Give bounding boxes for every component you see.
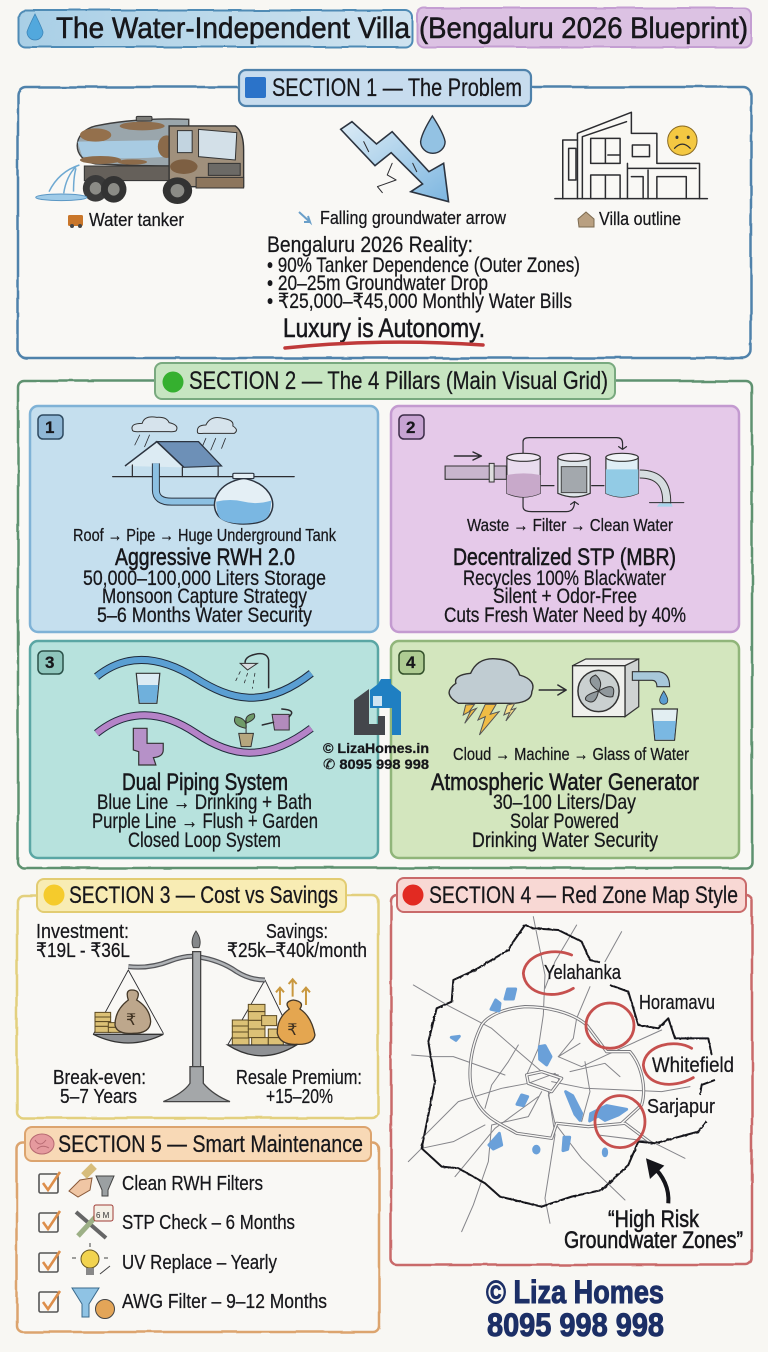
checklist row: STP check <box>39 1205 295 1238</box>
map arrow <box>652 1165 668 1203</box>
break-even value: Break-even: <box>53 1067 146 1089</box>
checklist row: clean RWH filters <box>39 1166 263 1197</box>
icon: balance scale: ₹ <box>126 1012 136 1029</box>
callout: luxury is autonomy: Luxury is Autonomy. <box>283 313 485 343</box>
pillar title: Aggressive RWH 2.0 <box>115 544 295 571</box>
caption: roof pipe tank: Roof → Pipe → Huge Underground Tank <box>73 525 336 545</box>
badge 4: 4 <box>406 653 416 672</box>
savings value <box>227 921 367 962</box>
text block: Bengaluru 2026 reality <box>267 232 580 313</box>
title banner <box>18 8 751 47</box>
map ring road <box>470 1007 652 1143</box>
text block: Bengaluru 2026 reality: • ₹25,000–₹45,000 Monthly Water Bills <box>267 290 572 313</box>
badge 2 <box>399 415 424 439</box>
pillar details: Recycles 100% Blackwater <box>463 567 666 590</box>
title text: The Water-Independent Villa <box>56 12 410 45</box>
icon: rain to underground tank <box>113 417 294 524</box>
pillar details <box>92 791 318 852</box>
panel: section 5 smart maintenance <box>17 1127 379 1332</box>
icon: water drop <box>27 14 43 40</box>
text block: Bengaluru 2026 reality: • 90% Tanker Dependence (Outer Zones) <box>267 254 580 277</box>
pillar details: 50,000–100,000 Liters Storage <box>83 567 326 590</box>
text block: Bengaluru 2026 reality: Bengaluru 2026 Reality: <box>267 232 473 257</box>
text block: Bengaluru 2026 reality: • 20–25m Groundwater Drop <box>267 272 488 295</box>
pillar details <box>472 791 658 852</box>
investment value <box>36 921 130 962</box>
pillar details: Monsoon Capture Strategy <box>102 585 307 608</box>
label: villa outline: Villa outline <box>599 209 681 229</box>
resale premium value: +15–20% <box>266 1086 333 1108</box>
section 2 header <box>155 363 615 399</box>
section 1 header: SECTION 1 — The Problem <box>272 74 522 102</box>
break-even value <box>53 1067 146 1108</box>
checklist row: AWG filter: AWG Filter – 9–12 Months <box>122 1291 327 1313</box>
badge 2: 2 <box>406 418 415 437</box>
pillar details: Purple Line → Flush + Garden <box>92 810 318 833</box>
checklist row: UV replace: UV Replace – Yearly <box>122 1252 277 1274</box>
pillar details: Cuts Fresh Water Need by 40% <box>444 604 686 627</box>
checklist row: clean RWH filters: Clean RWH Filters <box>122 1173 263 1195</box>
badge 3: 3 <box>45 653 54 672</box>
label: water tanker: Water tanker <box>89 210 184 230</box>
label: falling groundwater arrow: Falling groundwater arrow <box>320 208 507 228</box>
badge 3 <box>38 651 63 674</box>
pillar card 4: atmospheric water generator <box>391 641 739 858</box>
section 5 header <box>25 1127 371 1161</box>
pillar details: Closed Loop System <box>128 829 281 852</box>
map lakes <box>451 989 627 1156</box>
map: Bengaluru high-risk zones <box>408 917 715 1232</box>
resale premium value <box>236 1067 362 1108</box>
panel: section 1 the problem <box>18 70 751 358</box>
badge 1 <box>38 415 63 439</box>
pillar details: Silent + Odor-Free <box>493 585 637 608</box>
pillar title: Dual Piping System <box>122 769 288 796</box>
savings value: ₹25k–₹40k/month <box>227 940 367 962</box>
callout: high risk groundwater zones <box>564 1206 743 1254</box>
pillar details: Solar Powered <box>510 810 619 833</box>
section 1 header <box>239 70 531 106</box>
section 3 header: SECTION 3 — Cost vs Savings <box>69 882 338 909</box>
resale premium value: Resale Premium: <box>236 1067 362 1089</box>
icon: villa outline <box>555 112 707 199</box>
callout: high risk groundwater zones: “High Risk <box>608 1206 700 1233</box>
badge 1: 1 <box>45 418 54 437</box>
map red zone circles <box>523 952 693 1148</box>
watermark: Liza Homes logo: © LizaHomes.in <box>323 740 429 756</box>
pillar title: Atmospheric Water Generator <box>431 769 699 796</box>
section 3 header <box>37 879 346 912</box>
pillar details: Drinking Water Security <box>472 829 658 852</box>
pillar card 1: aggressive RWH <box>30 406 378 632</box>
map label: Sarjapur: Sarjapur <box>647 1096 715 1118</box>
checklist row: STP check: 6 M <box>96 1211 110 1220</box>
icon: balance scale: ₹ <box>287 1022 297 1039</box>
pillar details: 30–100 Liters/Day <box>493 791 636 814</box>
section 4 header <box>397 878 746 912</box>
pillar card 2: decentralized STP <box>391 406 739 632</box>
icon: waste filter clean water flow <box>445 438 684 512</box>
footer brand and phone: © Liza Homes <box>486 1274 664 1310</box>
footer brand and phone: 8095 998 998 <box>487 1307 664 1343</box>
map outline <box>422 925 715 1207</box>
icon: cloud machine glass <box>449 659 677 740</box>
savings value: Savings: <box>266 921 328 943</box>
pillar card 3: dual piping <box>30 641 378 858</box>
pillar title: Decentralized STP (MBR) <box>453 544 676 571</box>
section 5 header: SECTION 5 — Smart Maintenance <box>58 1131 363 1158</box>
pillar details: 5–6 Months Water Security <box>97 604 312 627</box>
map roads <box>408 917 690 1232</box>
icon: falling groundwater arrow <box>341 116 449 202</box>
panel: section 3 cost vs savings <box>17 879 378 1118</box>
icon: water tanker <box>36 116 244 204</box>
icon: dual pipes with fixtures <box>97 654 311 765</box>
investment value: Investment: <box>36 921 129 943</box>
map label: Yelahanka: Yelahanka <box>544 962 622 984</box>
panel: section 2 the 4 pillars <box>18 363 752 868</box>
checklist row: STP check: STP Check – 6 Months <box>122 1212 295 1234</box>
map label: Whitefield: Whitefield <box>652 1054 734 1077</box>
pillar details: Blue Line → Drinking + Bath <box>97 791 312 814</box>
checklist row: AWG filter <box>39 1288 327 1318</box>
pillar details <box>83 567 326 627</box>
map label: Horamavu: Horamavu <box>639 992 715 1014</box>
checklist row: UV replace <box>39 1243 277 1275</box>
section 2 header: SECTION 2 — The 4 Pillars (Main Visual Grid) <box>189 367 608 395</box>
watermark: Liza Homes logo: ✆ 8095 998 998 <box>323 756 429 772</box>
caption: waste filter clean water: Waste → Filter → Clean Water <box>467 515 673 535</box>
investment value: ₹19L - ₹36L <box>36 940 130 962</box>
badge 4 <box>399 651 424 674</box>
panel: section 4 red zone map <box>391 878 752 1265</box>
watermark: Liza Homes logo <box>323 679 429 772</box>
pillar details <box>444 567 686 627</box>
break-even value: 5–7 Years <box>60 1086 137 1108</box>
caption: cloud machine glass: Cloud → Machine → Glass of Water <box>453 744 689 764</box>
icon: balance scale <box>93 931 315 1102</box>
title subtitle: (Bengaluru 2026 Blueprint) <box>419 12 748 45</box>
footer brand and phone <box>486 1274 664 1343</box>
